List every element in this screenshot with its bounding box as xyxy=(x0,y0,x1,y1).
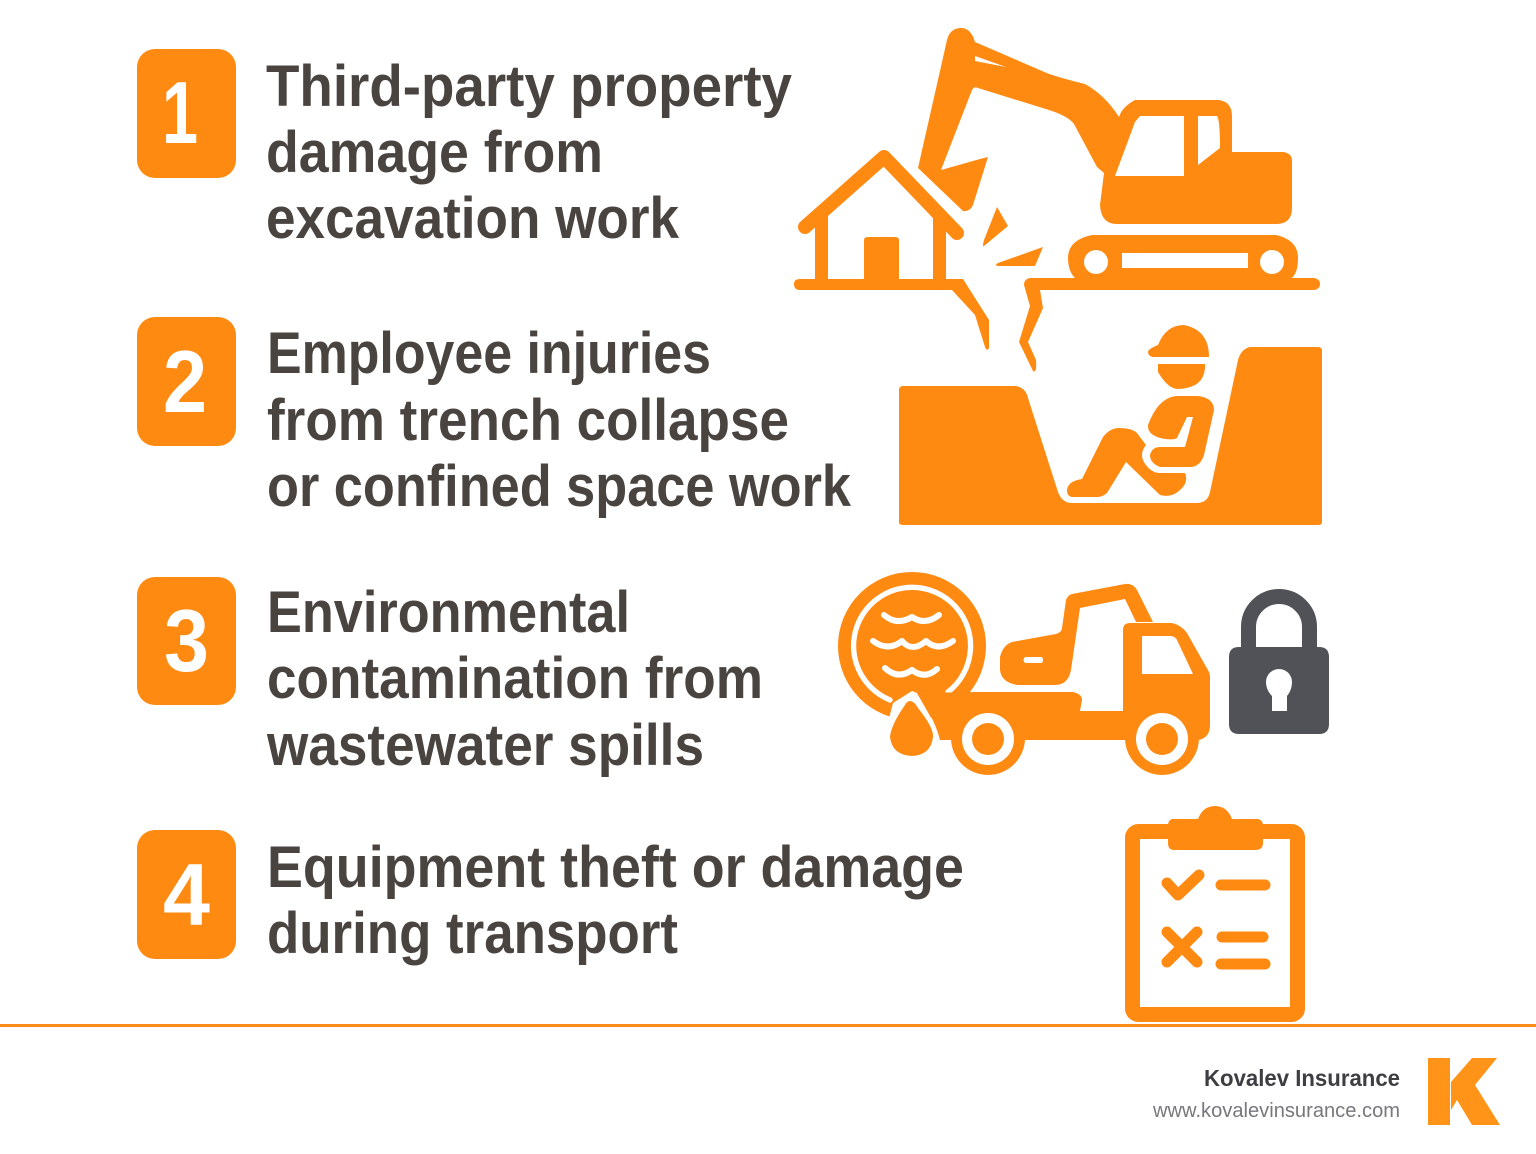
number badge 1: 1 xyxy=(162,63,198,162)
footer company text: Kovalev Insurance xyxy=(1204,1065,1400,1091)
worker legs xyxy=(1067,428,1186,497)
footer company text: www.kovalevinsurance.com xyxy=(1152,1100,1400,1122)
worker torso and arm xyxy=(1148,396,1214,467)
spill clearing xyxy=(880,691,950,775)
footer rule xyxy=(0,1024,1536,1027)
truck wheels xyxy=(951,701,1199,775)
text: item 2: from trench collapse xyxy=(267,388,789,453)
text: item 1 xyxy=(266,54,792,251)
text: item 2: Employee injuries xyxy=(267,321,711,386)
icon: excavator striking house xyxy=(794,28,1320,372)
text: item 3: contamination from xyxy=(267,646,763,711)
icon: worker in collapsed trench xyxy=(899,325,1322,525)
number badge 4: 4 xyxy=(163,845,210,944)
truck dump bed xyxy=(1000,584,1153,685)
debris shards xyxy=(983,207,1043,266)
text: item 2 xyxy=(267,321,852,519)
house xyxy=(805,157,957,233)
text: item 1: damage from xyxy=(266,120,603,185)
number badge 2: 2 xyxy=(163,332,207,431)
clipboard clip xyxy=(1168,806,1263,850)
truck body xyxy=(917,623,1210,740)
checklist lines xyxy=(1221,885,1265,964)
text: item 3: wastewater spills xyxy=(266,713,704,778)
text: item 4: during transport xyxy=(267,901,678,966)
item 1: third-party property damage xyxy=(137,49,792,251)
ground with crack xyxy=(794,279,989,350)
worker helmet and face xyxy=(1148,325,1209,389)
trench walls xyxy=(899,347,1322,525)
excavator tracks xyxy=(1068,235,1298,279)
item 4: equipment theft xyxy=(137,830,964,966)
check mark and cross xyxy=(1167,875,1199,962)
text: item 4 xyxy=(267,835,964,966)
icon: padlock xyxy=(1229,596,1329,734)
icon: clipboard checklist xyxy=(1132,806,1298,1014)
number badge 1 xyxy=(137,49,236,178)
number badge 3: 3 xyxy=(164,591,209,690)
excavator body and boom xyxy=(918,28,1292,224)
text: item 3: Environmental xyxy=(267,580,630,645)
logo: K mark xyxy=(1428,1058,1500,1125)
waves xyxy=(873,615,953,675)
item 2: employee injuries xyxy=(137,317,852,519)
number badge 3 xyxy=(137,577,236,705)
text: item 1: Third-party property xyxy=(266,54,792,119)
number badge 4 xyxy=(137,830,236,959)
text: item 2: or confined space work xyxy=(267,454,852,519)
water ring xyxy=(838,572,986,720)
icon: truck with wastewater spill xyxy=(838,572,1210,775)
text: item 3 xyxy=(266,580,763,778)
item 3: environmental contamination xyxy=(137,577,763,778)
water drop xyxy=(890,701,933,756)
text: item 4: Equipment theft or damage xyxy=(267,835,964,900)
number badge 2 xyxy=(137,317,236,446)
footer company text xyxy=(1152,1065,1400,1122)
clipboard frame xyxy=(1132,832,1298,1014)
text: item 1: excavation work xyxy=(266,186,680,251)
